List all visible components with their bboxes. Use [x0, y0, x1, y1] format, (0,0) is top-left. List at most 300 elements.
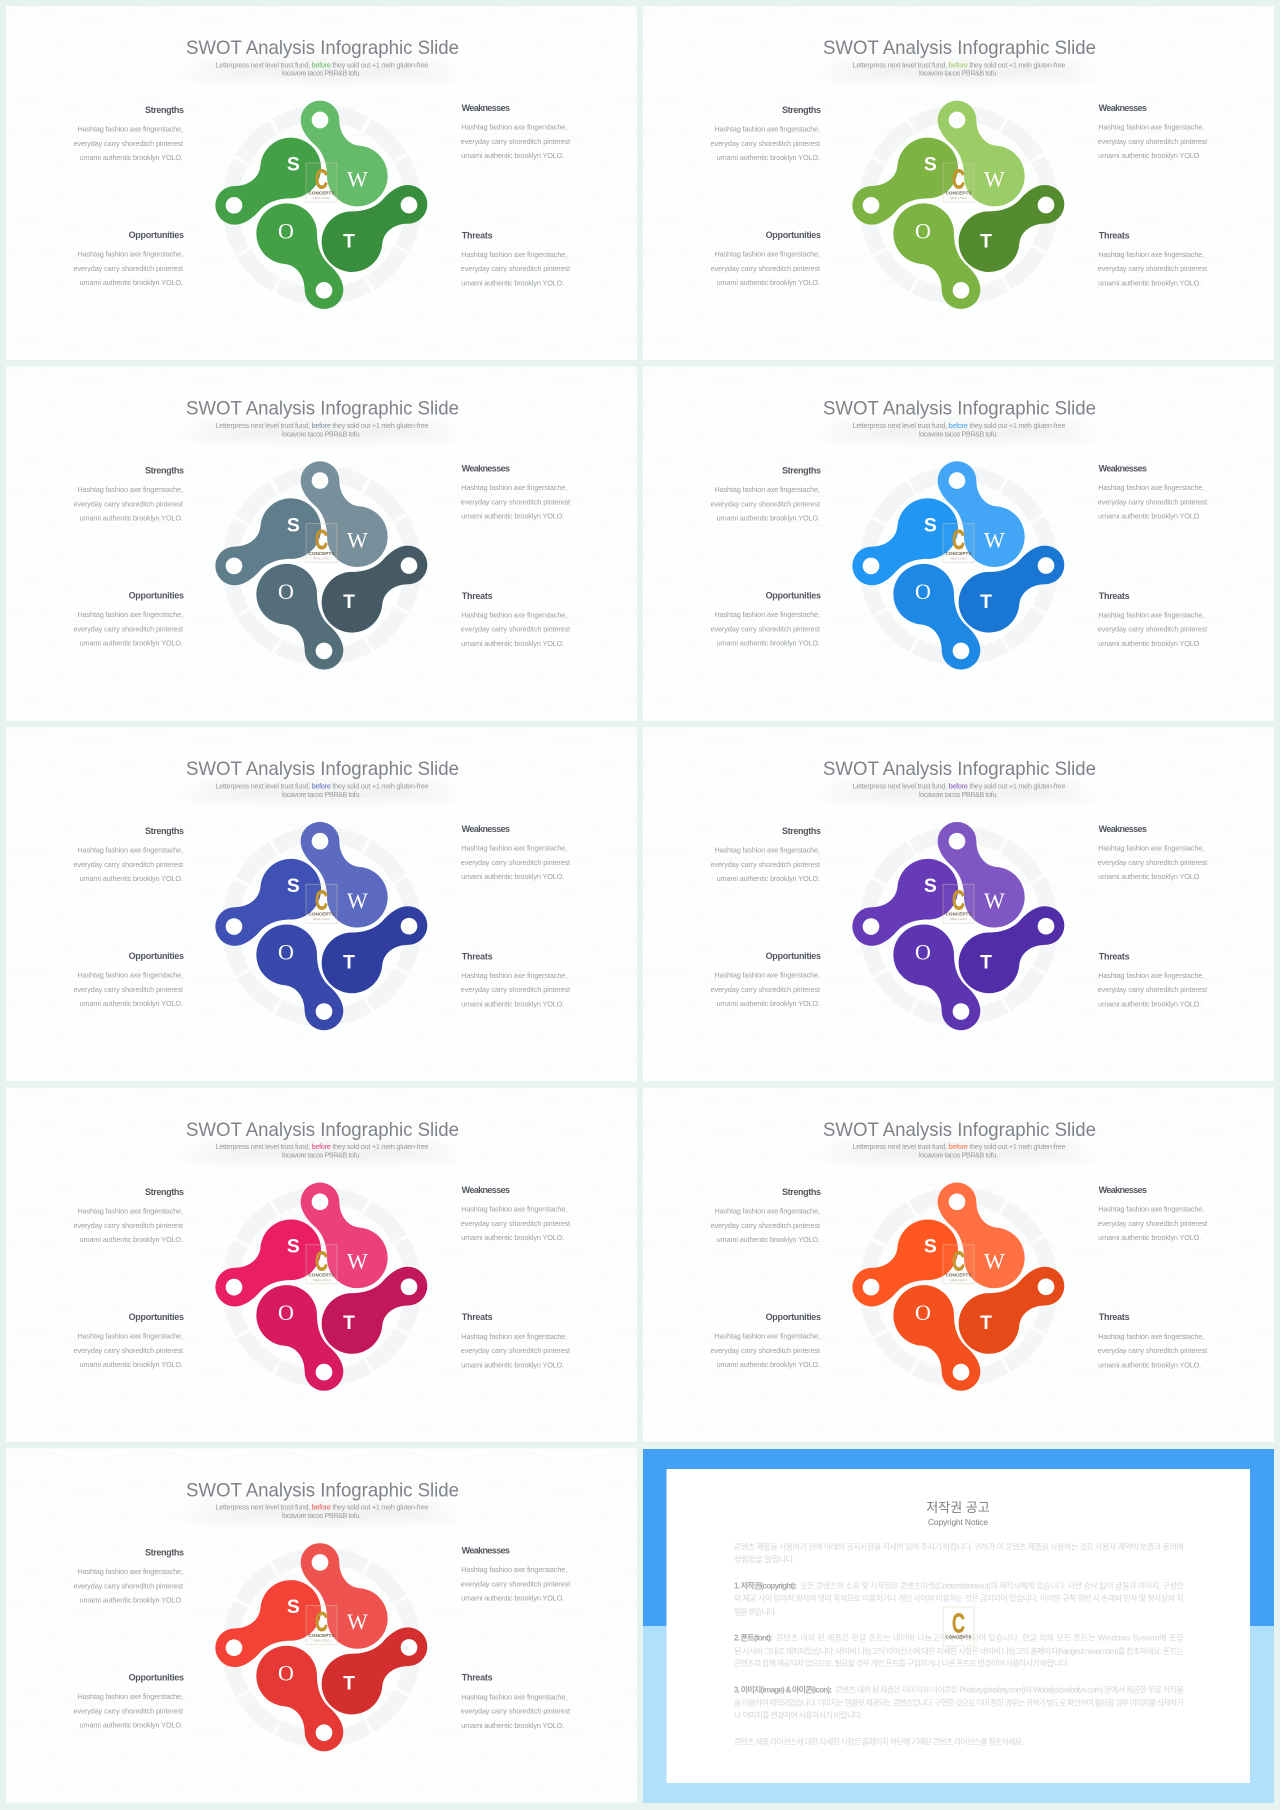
- text block: Threats: [1098, 952, 1207, 1009]
- blob S: [215, 138, 321, 225]
- watermark logo: [306, 884, 337, 923]
- blob W: W: [984, 167, 1005, 192]
- text block: Strengths: [74, 105, 184, 162]
- title: SWOT Analysis Infographic Slide: [823, 758, 1096, 780]
- text block: Strengths: Strengths: [782, 466, 821, 476]
- blob S: [852, 859, 958, 946]
- text block: Threats: umami authentic brooklyn YOLO.: [1098, 278, 1201, 288]
- blob W: W: [984, 1248, 1005, 1273]
- watermark logo: C: [952, 524, 965, 555]
- text block: Strengths: everyday carry shoreditch pinterest: [74, 860, 183, 869]
- text block: Threats: [461, 591, 570, 648]
- notice title: Copyright Notice: [928, 1517, 988, 1527]
- blob T: [959, 1267, 1064, 1354]
- text block: Threats: Hashtag fashion axe fingerstache,: [461, 1332, 567, 1341]
- text block: Threats: [461, 952, 570, 1009]
- text block: Threats: Threats: [1099, 591, 1130, 601]
- watermark logo: CONCEPTS: [946, 912, 972, 917]
- watermark logo: [306, 1245, 337, 1284]
- text block: Weaknesses: Weaknesses: [462, 824, 510, 834]
- SWOT diagram: [852, 1182, 1064, 1391]
- blob T: T: [980, 231, 992, 252]
- blob T: [959, 546, 1064, 633]
- text block: Opportunities: Hashtag fashion axe fingerstache,: [78, 1692, 183, 1701]
- SWOT diagram: [852, 822, 1064, 1030]
- panel: blue grey slide: [6, 367, 637, 721]
- text block: Opportunities: umami authentic brooklyn YOLO.: [717, 639, 820, 648]
- blob S: S: [924, 515, 937, 536]
- notice section 2: 콘텐츠 내의 된 제품은 한글 폰트는 네이버 나눔고딕과 제작되어 있습니다. 한글 외의 모든 폰트는 Windows System에 포함: [776, 1632, 1184, 1642]
- title: SWOT Analysis Infographic Slide: [823, 37, 1096, 59]
- subtitle: locavore tacos PBR&B tofu.: [282, 1511, 361, 1520]
- text block: Threats: everyday carry shoreditch pinterest: [1098, 625, 1207, 634]
- subtitle: Letterpress next level trust fund, before they sold out +1 meh gluten-free: [852, 782, 1066, 791]
- subtitle: Letterpress next level trust fund, before they sold out +1 meh gluten-free: [216, 421, 428, 430]
- watermark logo: [306, 1605, 337, 1644]
- text block: Weaknesses: everyday carry shoreditch pinterest: [461, 137, 570, 146]
- blob S: [852, 138, 958, 225]
- text block: Threats: everyday carry shoreditch pinterest: [461, 264, 570, 273]
- text block: Threats: umami authentic brooklyn YOLO.: [1098, 1360, 1201, 1369]
- SWOT diagram: [215, 1543, 427, 1751]
- text block: Threats: Threats: [1099, 1312, 1130, 1322]
- text block: Opportunities: [74, 230, 184, 287]
- text block: Opportunities: Opportunities: [129, 1312, 184, 1322]
- text block: Threats: everyday carry shoreditch pinterest: [1098, 985, 1207, 994]
- text block: Strengths: Strengths: [782, 105, 821, 115]
- text block: Threats: everyday carry shoreditch pinterest: [461, 625, 570, 634]
- text block: Opportunities: [74, 1672, 184, 1729]
- text block: Strengths: everyday carry shoreditch pinterest: [74, 500, 183, 509]
- panel: green slide: [6, 6, 637, 360]
- blob T: [322, 1627, 427, 1714]
- blob T: [959, 185, 1064, 272]
- text block: Opportunities: Hashtag fashion axe fingerstache,: [714, 610, 820, 619]
- text block: Strengths: Hashtag fashion axe fingerstache,: [78, 1567, 183, 1576]
- watermark logo: REAL LOGO: [313, 1638, 330, 1642]
- text block: Threats: umami authentic brooklyn YOLO.: [461, 639, 564, 648]
- panel: blue slide: [643, 367, 1274, 721]
- title: SWOT Analysis Infographic Slide: [186, 1479, 459, 1501]
- text block: Threats: Threats: [1099, 952, 1130, 962]
- text block: Threats: everyday carry shoreditch pinterest: [1098, 264, 1207, 273]
- notice section 2: 된 사서와 그대로 제작되었습니다. 네이버 나눔고딕 라이선스에 대한 자세한 사항은 네이버 나눔고딕 홈페이지(hangeul.naver.com)를 참조하세요. 폰트는: [734, 1646, 1184, 1656]
- blob O: [893, 564, 980, 670]
- notice section 3: 나 이미지를 변경하여 사용하시기 바랍니다.: [734, 1710, 862, 1720]
- blob O: [893, 1285, 980, 1391]
- subtitle: [852, 60, 1066, 78]
- text block: Weaknesses: Hashtag fashion axe fingerstache,: [461, 122, 567, 132]
- text block: Weaknesses: Weaknesses: [462, 1185, 510, 1195]
- blob O: O: [915, 1300, 931, 1325]
- text block: Strengths: umami authentic brooklyn YOLO.: [717, 153, 820, 162]
- blob S: S: [924, 876, 937, 897]
- text block: Threats: Threats: [462, 230, 493, 240]
- text block: Weaknesses: everyday carry shoreditch pinterest: [1098, 498, 1207, 507]
- text block: Weaknesses: Hashtag fashion axe fingerstache,: [461, 844, 567, 853]
- text block: Strengths: everyday carry shoreditch pinterest: [710, 1221, 820, 1230]
- text block: Threats: everyday carry shoreditch pinterest: [1098, 1346, 1207, 1355]
- blob W: [301, 822, 388, 928]
- blob S: S: [287, 155, 300, 176]
- panel: red slide: [6, 1448, 637, 1802]
- text block: Strengths: Strengths: [145, 1187, 184, 1197]
- blob W: [301, 461, 388, 567]
- watermark logo: C: [952, 885, 965, 916]
- text block: Threats: [1098, 591, 1207, 648]
- subtitle: locavore tacos PBR&B tofu.: [282, 429, 361, 438]
- notice section 1: 벌을 받습니다.: [734, 1606, 777, 1616]
- text block: Strengths: [74, 1547, 184, 1604]
- text block: Opportunities: Opportunities: [129, 951, 184, 961]
- text block: Strengths: [74, 826, 184, 883]
- blob O: [893, 925, 980, 1030]
- text block: Weaknesses: [461, 464, 570, 521]
- SWOT diagram: [215, 461, 427, 670]
- subtitle: [852, 782, 1066, 799]
- blob O: O: [278, 1661, 294, 1686]
- text block: Opportunities: [74, 951, 184, 1008]
- text block: Weaknesses: Weaknesses: [1099, 103, 1147, 113]
- text block: Opportunities: Hashtag fashion axe fingerstache,: [714, 250, 820, 258]
- blob S: [215, 498, 321, 585]
- blob O: O: [278, 1300, 294, 1325]
- title: SWOT Analysis Infographic Slide: [186, 398, 459, 420]
- watermark logo: C: [952, 1245, 965, 1276]
- notice section 3: [734, 1684, 1184, 1720]
- text block: Opportunities: Opportunities: [766, 591, 821, 601]
- blob W: [938, 461, 1025, 567]
- blob S: S: [924, 155, 937, 176]
- blob O: [256, 925, 343, 1030]
- text block: Opportunities: [74, 591, 184, 648]
- text block: Weaknesses: Weaknesses: [462, 464, 510, 474]
- watermark logo: REAL LOGO: [950, 196, 967, 200]
- text block: Opportunities: umami authentic brooklyn YOLO.: [80, 1720, 183, 1729]
- blob O: [256, 564, 343, 670]
- panel: light green slide: [643, 6, 1274, 360]
- subtitle: locavore tacos PBR&B tofu.: [919, 429, 998, 438]
- blob T: T: [980, 1313, 992, 1334]
- text block: Opportunities: [710, 591, 821, 648]
- notice title: 저작권 공고: [926, 1500, 990, 1515]
- blob T: [959, 906, 1064, 993]
- title: SWOT Analysis Infographic Slide: [186, 37, 459, 59]
- text block: Weaknesses: everyday carry shoreditch pinterest: [461, 858, 570, 867]
- text block: Strengths: Hashtag fashion axe fingerstache,: [78, 124, 183, 134]
- subtitle: locavore tacos PBR&B tofu.: [282, 69, 361, 78]
- watermark logo: REAL LOGO: [313, 196, 330, 200]
- text block: Threats: everyday carry shoreditch pinterest: [461, 985, 570, 994]
- text block: Opportunities: umami authentic brooklyn YOLO.: [80, 278, 183, 287]
- watermark logo: REAL LOGO: [950, 917, 967, 921]
- text block: Opportunities: everyday carry shoreditch pinterest: [710, 1346, 820, 1355]
- panel: pink slide: [6, 1088, 637, 1442]
- text block: Threats: everyday carry shoreditch pinterest: [461, 1706, 570, 1715]
- text block: Weaknesses: Hashtag fashion axe fingerstache,: [1098, 483, 1204, 492]
- blob W: [301, 1543, 388, 1649]
- text block: Opportunities: umami authentic brooklyn YOLO.: [80, 1360, 183, 1369]
- subtitle: [216, 1503, 428, 1520]
- text block: Strengths: umami authentic brooklyn YOLO.: [80, 1235, 183, 1244]
- title: SWOT Analysis Infographic Slide: [186, 1119, 459, 1141]
- text block: Opportunities: everyday carry shoreditch pinterest: [74, 264, 183, 273]
- blob T: T: [343, 231, 355, 252]
- subtitle: Letterpress next level trust fund, before they sold out +1 meh gluten-free: [852, 60, 1066, 69]
- blob S: [215, 1219, 321, 1306]
- title: SWOT Analysis Infographic Slide: [186, 758, 459, 780]
- subtitle: Letterpress next level trust fund, before they sold out +1 meh gluten-free: [216, 782, 428, 791]
- text block: Opportunities: everyday carry shoreditch pinterest: [74, 625, 183, 634]
- subtitle: locavore tacos PBR&B tofu.: [282, 790, 361, 799]
- notice intro: 성립함을 알립니다.: [734, 1554, 795, 1564]
- subtitle: Letterpress next level trust fund, before they sold out +1 meh gluten-free: [216, 60, 428, 69]
- text block: Weaknesses: [1098, 1185, 1207, 1242]
- blob O: O: [278, 579, 294, 604]
- notice title: [926, 1500, 990, 1527]
- panel: indigo slide: [6, 727, 637, 1081]
- watermark logo: [306, 163, 337, 202]
- watermark logo: C: [315, 1606, 328, 1637]
- text block: Weaknesses: [461, 1545, 570, 1602]
- text block: Weaknesses: umami authentic brooklyn YOLO.: [461, 1593, 564, 1602]
- subtitle: locavore tacos PBR&B tofu.: [919, 1151, 998, 1160]
- text block: Weaknesses: Hashtag fashion axe fingerstache,: [461, 1204, 567, 1213]
- text block: Threats: Threats: [462, 1673, 493, 1683]
- text block: Threats: [461, 1312, 570, 1369]
- text block: Strengths: Strengths: [782, 826, 821, 836]
- blob T: [322, 1267, 427, 1354]
- blob S: S: [287, 1236, 300, 1257]
- text block: Strengths: umami authentic brooklyn YOLO.: [80, 153, 183, 162]
- text block: Opportunities: everyday carry shoreditch pinterest: [74, 1706, 183, 1715]
- text block: Threats: Hashtag fashion axe fingerstache,: [1098, 971, 1204, 980]
- text block: Opportunities: [710, 230, 821, 287]
- notice section 1: 1. 저작권(copyright):: [734, 1580, 797, 1590]
- text block: Opportunities: Hashtag fashion axe fingerstache,: [78, 610, 183, 619]
- text block: Weaknesses: [461, 1185, 570, 1242]
- text block: Weaknesses: umami authentic brooklyn YOLO.: [1098, 151, 1201, 160]
- text block: Opportunities: umami authentic brooklyn YOLO.: [80, 639, 183, 648]
- text block: Threats: umami authentic brooklyn YOLO.: [1098, 1000, 1201, 1009]
- text block: Weaknesses: everyday carry shoreditch pinterest: [461, 1579, 570, 1588]
- watermark logo: CONCEPTS: [946, 551, 972, 556]
- text block: Opportunities: Hashtag fashion axe fingerstache,: [78, 250, 183, 258]
- text block: Threats: Threats: [462, 591, 493, 601]
- text block: Weaknesses: umami authentic brooklyn YOLO.: [461, 151, 564, 160]
- blob O: O: [278, 940, 294, 965]
- notice section 1: 의 제공 사이 임의적 회사의 영리 목적으로 이용하거나 개인 사이의 이용하는 것은 금지되어 있습니다. 이러한 규칙 위반 시 손해와 민사 및 형사상의 처: [734, 1593, 1184, 1603]
- blob W: [301, 1182, 388, 1288]
- text block: Strengths: everyday carry shoreditch pinterest: [74, 139, 183, 148]
- text block: Opportunities: Opportunities: [766, 951, 821, 961]
- notice section 2: 콘텐츠의 함께 제공되지 않으므로, 필요할 경우 개인 폰트를 구입하거나 다른 폰트로 변경하여 사용하시기 바랍니다.: [734, 1658, 1069, 1668]
- blob S: [215, 1580, 321, 1667]
- text block: Weaknesses: everyday carry shoreditch pinterest: [1098, 858, 1207, 867]
- blob W: W: [347, 1248, 368, 1273]
- text block: Strengths: Hashtag fashion axe fingerstache,: [714, 485, 820, 494]
- text block: Threats: Threats: [1099, 230, 1130, 240]
- subtitle: locavore tacos PBR&B tofu.: [282, 1151, 361, 1160]
- blob O: O: [915, 940, 931, 965]
- text block: Opportunities: [710, 951, 821, 1008]
- text block: Weaknesses: [1098, 824, 1207, 881]
- text block: Strengths: everyday carry shoreditch pinterest: [74, 1221, 183, 1230]
- blob O: [256, 1285, 343, 1391]
- text block: Strengths: Hashtag fashion axe fingerstache,: [78, 846, 183, 855]
- blob O: O: [915, 218, 931, 243]
- text block: Threats: Threats: [462, 952, 493, 962]
- watermark logo: [943, 524, 974, 563]
- blob S: S: [287, 876, 300, 897]
- blob O: O: [915, 579, 931, 604]
- text block: Opportunities: Opportunities: [129, 591, 184, 601]
- watermark logo: REAL LOGO: [313, 557, 330, 561]
- text block: Threats: umami authentic brooklyn YOLO.: [461, 1360, 564, 1369]
- blob S: [852, 498, 958, 585]
- text block: Opportunities: Opportunities: [129, 230, 184, 240]
- text block: Threats: umami authentic brooklyn YOLO.: [1098, 639, 1201, 648]
- watermark logo: CONCEPTS: [946, 1634, 972, 1640]
- SWOT diagram: [852, 101, 1064, 309]
- watermark logo: CONCEPTS: [946, 1272, 972, 1277]
- text block: Opportunities: umami authentic brooklyn YOLO.: [717, 1360, 820, 1369]
- watermark logo: [943, 163, 974, 202]
- text block: Weaknesses: umami authentic brooklyn YOLO.: [1098, 872, 1201, 881]
- blob S: S: [924, 1236, 937, 1257]
- text block: Weaknesses: Hashtag fashion axe fingerstache,: [461, 483, 567, 492]
- watermark logo: REAL LOGO: [950, 557, 967, 561]
- SWOT diagram: [215, 101, 427, 309]
- notice intro: 콘텐츠 제품을 사용하기 전에 아래의 공지사항을 자세히 읽어 주시기 바랍니다. 귀하가 이 콘텐츠 제품을 사용하는 것은 사용자 계약의 보증과 동의에: [734, 1542, 1184, 1552]
- watermark logo: [943, 1607, 974, 1646]
- blob T: T: [343, 1313, 355, 1334]
- text block: Threats: umami authentic brooklyn YOLO.: [461, 278, 564, 288]
- text block: Weaknesses: everyday carry shoreditch pinterest: [461, 498, 570, 507]
- blob W: W: [984, 888, 1005, 913]
- text block: Opportunities: Opportunities: [129, 1672, 184, 1682]
- SWOT diagram: [215, 822, 427, 1030]
- text block: Threats: Hashtag fashion axe fingerstache,: [1098, 1332, 1204, 1341]
- watermark logo: CONCEPTS: [308, 1633, 334, 1638]
- text block: Strengths: [74, 1187, 184, 1244]
- text block: Strengths: Strengths: [145, 466, 184, 476]
- watermark logo: C: [952, 1608, 965, 1638]
- blob W: W: [347, 888, 368, 913]
- text block: Weaknesses: everyday carry shoreditch pinterest: [1098, 137, 1207, 146]
- text block: Strengths: umami authentic brooklyn YOLO.: [80, 1595, 183, 1604]
- watermark logo: REAL LOGO: [950, 1278, 967, 1282]
- subtitle: [216, 782, 428, 799]
- blob O: O: [278, 218, 294, 243]
- subtitle: locavore tacos PBR&B tofu.: [919, 790, 998, 799]
- text block: Threats: [461, 1673, 570, 1730]
- text block: Weaknesses: Weaknesses: [1099, 1185, 1147, 1195]
- watermark logo: C: [315, 885, 328, 916]
- text block: Threats: [461, 230, 570, 288]
- text block: Threats: Hashtag fashion axe fingerstache,: [461, 971, 567, 980]
- notice section 3: 콘텐츠 내의 된 제품은 이미지와 아이콘은 Pixabay(pixabay.com)와 Webalys(webalys.com) 등에서 제공한 무료 저작물: [835, 1684, 1184, 1694]
- text block: Opportunities: everyday carry shoreditch pinterest: [710, 264, 820, 273]
- text block: Threats: Threats: [462, 1312, 493, 1322]
- blob W: [938, 822, 1025, 928]
- text block: Weaknesses: [1098, 103, 1207, 160]
- text block: Strengths: everyday carry shoreditch pinterest: [74, 1581, 183, 1590]
- blob T: [322, 546, 427, 633]
- watermark logo: CONCEPTS: [308, 551, 334, 556]
- subtitle: [852, 421, 1066, 438]
- text block: Strengths: Strengths: [145, 826, 184, 836]
- blob S: S: [287, 1597, 300, 1618]
- text block: Strengths: Strengths: [145, 1547, 184, 1557]
- panel: orange slide: [643, 1088, 1274, 1442]
- text block: Strengths: Strengths: [782, 1187, 821, 1197]
- blob T: T: [343, 1674, 355, 1695]
- text block: Opportunities: Hashtag fashion axe fingerstache,: [714, 1331, 820, 1340]
- text block: Weaknesses: Weaknesses: [462, 1545, 510, 1555]
- watermark logo: [306, 524, 337, 563]
- text block: Weaknesses: Weaknesses: [462, 103, 510, 113]
- text block: Opportunities: Hashtag fashion axe fingerstache,: [714, 971, 820, 980]
- subtitle: Letterpress next level trust fund, before they sold out +1 meh gluten-free: [852, 421, 1066, 430]
- watermark logo: REAL LOGO: [313, 1278, 330, 1282]
- text block: Threats: umami authentic brooklyn YOLO.: [461, 1721, 564, 1730]
- text block: Weaknesses: Hashtag fashion axe fingerstache,: [1098, 122, 1204, 132]
- text block: Weaknesses: Hashtag fashion axe fingerstache,: [1098, 844, 1204, 853]
- notice section 2: [734, 1632, 1184, 1668]
- text block: Weaknesses: umami authentic brooklyn YOLO.: [461, 512, 564, 521]
- text block: Opportunities: Hashtag fashion axe fingerstache,: [78, 971, 183, 980]
- text block: Strengths: Hashtag fashion axe fingerstache,: [78, 485, 183, 494]
- text block: Strengths: everyday carry shoreditch pinterest: [710, 139, 820, 148]
- text block: Weaknesses: Hashtag fashion axe fingerstache,: [1098, 1204, 1204, 1213]
- subtitle: Letterpress next level trust fund, before they sold out +1 meh gluten-free: [216, 1503, 428, 1512]
- subtitle: Letterpress next level trust fund, before they sold out +1 meh gluten-free: [852, 1142, 1066, 1151]
- SWOT diagram: [215, 1182, 427, 1391]
- text block: Strengths: everyday carry shoreditch pinterest: [710, 860, 820, 869]
- text block: Weaknesses: [1098, 464, 1207, 521]
- text block: Threats: Hashtag fashion axe fingerstache,: [1098, 250, 1204, 259]
- text block: Weaknesses: [461, 824, 570, 881]
- text block: Strengths: umami authentic brooklyn YOLO.: [717, 514, 820, 523]
- text block: Opportunities: everyday carry shoreditch pinterest: [710, 625, 820, 634]
- text block: Weaknesses: umami authentic brooklyn YOLO.: [461, 872, 564, 881]
- blob S: [215, 859, 321, 946]
- notice intro: [734, 1542, 1184, 1564]
- watermark logo: C: [315, 524, 328, 555]
- blob T: T: [343, 953, 355, 974]
- text block: Weaknesses: [461, 103, 570, 160]
- watermark logo: C: [315, 164, 328, 194]
- subtitle: Letterpress next level trust fund, before they sold out +1 meh gluten-free: [216, 1142, 428, 1151]
- blob T: T: [980, 953, 992, 974]
- watermark logo: C: [315, 1245, 328, 1276]
- notice section 3: 3. 이미지(image) & 아이콘(icon):: [734, 1684, 832, 1694]
- blob O: [256, 203, 343, 309]
- text block: Weaknesses: Weaknesses: [1099, 824, 1147, 834]
- text block: Opportunities: [710, 1312, 821, 1369]
- text block: Threats: [1098, 230, 1207, 288]
- text block: Opportunities: Opportunities: [766, 230, 821, 240]
- text block: Weaknesses: umami authentic brooklyn YOLO.: [461, 1233, 564, 1242]
- text block: Opportunities: everyday carry shoreditch pinterest: [74, 985, 183, 994]
- text block: Strengths: everyday carry shoreditch pinterest: [710, 500, 820, 509]
- text block: Weaknesses: Hashtag fashion axe fingerstache,: [461, 1565, 567, 1574]
- blob S: S: [287, 515, 300, 536]
- subtitle: [216, 421, 428, 438]
- blob W: [938, 1182, 1025, 1288]
- text block: Strengths: Hashtag fashion axe fingerstache,: [714, 846, 820, 855]
